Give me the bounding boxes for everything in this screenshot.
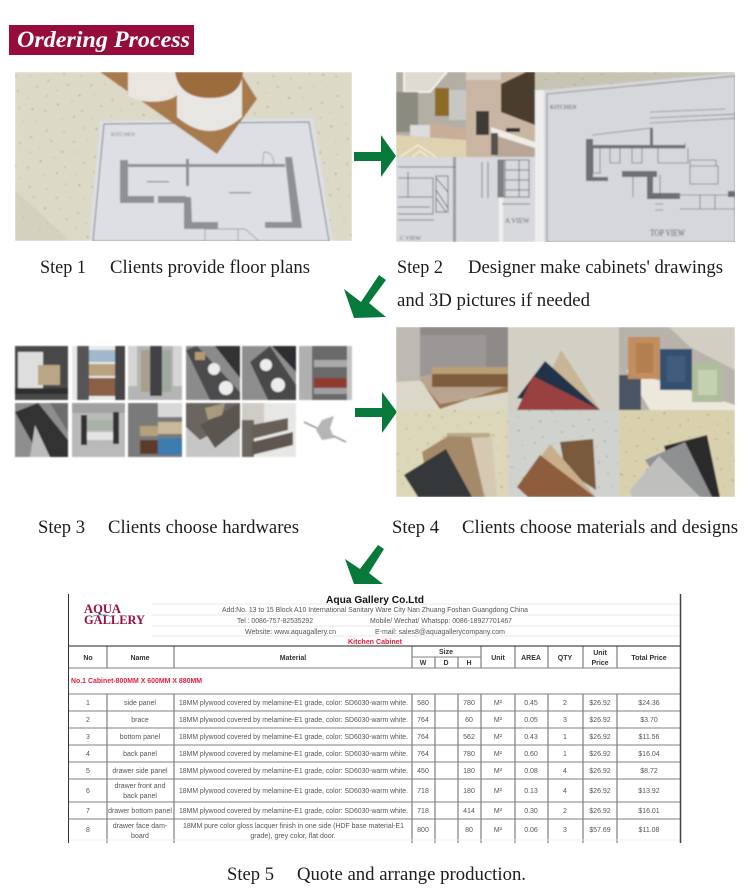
step 2 caption: and 3D pictures if needed: [397, 290, 590, 311]
column headers: Size: [439, 649, 453, 656]
row 4: M²: [494, 751, 503, 758]
column headers: D: [443, 660, 449, 667]
arrow: step 4 to step 5: [345, 545, 384, 584]
step 1 caption: Clients provide floor plans: [110, 257, 310, 278]
row 6: 180: [463, 788, 475, 795]
row 6: 718: [417, 788, 429, 795]
step 2 caption: Designer make cabinets' drawings: [468, 257, 723, 278]
row 6: 18MM plywood covered by melamine-E1 grade, color: SD6030-warm white.: [179, 788, 408, 795]
hardware: drawer with plates: [242, 346, 296, 400]
row 3: [86, 734, 660, 741]
column headers: Name: [130, 655, 150, 662]
row 7: M²: [494, 808, 503, 815]
3D render: kitchen: [396, 72, 466, 157]
row 6: $13.92: [638, 788, 660, 795]
row 4: $16.04: [638, 751, 660, 758]
column headers: Total Price: [631, 655, 667, 662]
company header: Website: www.aquagallery.cn: [245, 629, 336, 636]
row 1: $26.92: [589, 700, 611, 707]
hardware: drawer organiser: [15, 403, 68, 457]
row 8: 0.06: [524, 827, 538, 834]
material: walnut panels: [508, 410, 619, 497]
hardware: drawer with bowls: [186, 346, 240, 400]
company header: Kitchen Cabinet: [348, 639, 403, 646]
row 6: $26.92: [589, 788, 611, 795]
arrow: step 1 to step 2: [354, 135, 396, 177]
row 7: [86, 808, 660, 815]
row 3: 18MM plywood covered by melamine-E1 grade, color: SD6030-warm white.: [179, 734, 408, 741]
hardware: hinge: [304, 416, 346, 442]
logo: Aqua Gallery: [84, 601, 146, 627]
row 2: 3: [563, 717, 567, 724]
row 5: 5: [86, 768, 90, 775]
row 1: 0.45: [524, 700, 538, 707]
company header: Mobile/ Wechat/ Whatspp: 0086-18927701467: [370, 618, 512, 625]
row 8: 80: [465, 827, 473, 834]
row 5: 450: [417, 768, 429, 775]
column headers: Price: [591, 660, 609, 667]
row 7: 7: [86, 808, 90, 815]
column headers: Material: [280, 655, 306, 662]
row 2: 18MM plywood covered by melamine-E1 grade, color: SD6030-warm white.: [179, 717, 408, 724]
row 4: 1: [563, 751, 567, 758]
material: plywood samples: [396, 327, 508, 410]
row 4: 780: [463, 751, 475, 758]
column headers: [83, 649, 667, 667]
step 5 caption: Quote and arrange production.: [297, 864, 526, 885]
quotation table: [68, 594, 681, 843]
hardware: larder pull-out: [128, 403, 182, 457]
row 5: $26.92: [589, 768, 611, 775]
row 7: 0.30: [524, 808, 538, 815]
step 4 caption: Clients choose materials and designs: [462, 517, 738, 538]
step 3 caption: Step 3: [38, 517, 85, 538]
view drawings: A VIEW: [505, 217, 530, 225]
row 3: 562: [463, 734, 475, 741]
row 5: $8.72: [640, 768, 658, 775]
row 1: 18MM plywood covered by melamine-E1 grade, color: SD6030-warm white.: [179, 700, 408, 707]
row 5: 18MM plywood covered by melamine-E1 grade, color: SD6030-warm white.: [179, 768, 408, 775]
hardware: two drawers on cabinet: [242, 403, 296, 457]
photo: floor plan on speckled counter: KITCHEN: [111, 132, 135, 138]
row 6: 4: [563, 788, 567, 795]
row 3: 1: [563, 734, 567, 741]
row 1: 2: [563, 700, 567, 707]
photo grid: hardware: [15, 346, 352, 457]
3D render: tall units: [466, 72, 535, 157]
row 1: $24.36: [638, 700, 660, 707]
row 4: 0.60: [524, 751, 538, 758]
logo: Aqua Gallery: AQUA: [84, 601, 122, 616]
row 3: M²: [494, 734, 503, 741]
row 8: 800: [417, 827, 429, 834]
row 7: 18MM plywood covered by melamine-E1 grade, color: SD6030-warm white.: [179, 808, 408, 815]
row 8: board: [131, 833, 149, 840]
row 2: 0.05: [524, 717, 538, 724]
row 2: $26.92: [589, 717, 611, 724]
top view drawing: TOP VIEW: [650, 228, 685, 238]
row 5: [86, 768, 658, 775]
row 4: back panel: [123, 751, 157, 758]
row 7: drawer bottom panel: [108, 808, 172, 815]
row 6: drawer front and: [115, 783, 166, 790]
row 2: $3.70: [640, 717, 658, 724]
material: red and blue panels: [508, 327, 619, 410]
view drawings: [396, 157, 535, 242]
step 1 caption: Step 1: [40, 257, 86, 278]
column headers: W: [420, 660, 427, 667]
material: dark and wood panels: [396, 410, 508, 497]
row 7: $16.01: [638, 808, 660, 815]
row 2: 764: [417, 717, 429, 724]
column headers: Unit: [491, 655, 505, 662]
step 5 caption: Step 5: [227, 864, 274, 885]
company header: Tel : 0086-757-82535292: [237, 618, 313, 625]
company header: [222, 595, 528, 646]
row 6: [86, 783, 660, 800]
hardware: corner larder: [128, 346, 182, 400]
hardware: open drawers: [186, 403, 240, 457]
row 5: 180: [463, 768, 475, 775]
row 3: 3: [86, 734, 90, 741]
row 1: 780: [463, 700, 475, 707]
row 7: 718: [417, 808, 429, 815]
row 8: drawer face dam-: [113, 823, 168, 830]
row 6: 0.13: [524, 788, 538, 795]
hardware: corner pull-out: [15, 346, 68, 400]
view drawings: C VIEW: [400, 236, 421, 242]
row 6: back panel: [123, 793, 157, 800]
title banner: Ordering Process: [17, 27, 190, 52]
row 8: 3: [563, 827, 567, 834]
company header: Aqua Gallery Co.Ltd: [326, 595, 424, 606]
row 2: [86, 717, 658, 724]
row 7: $26.92: [589, 808, 611, 815]
column headers: Unit: [593, 650, 607, 657]
row 4: 764: [417, 751, 429, 758]
row 2: brace: [131, 717, 149, 724]
row 4: $26.92: [589, 751, 611, 758]
photo: cabinet drawings and 3D render: [396, 72, 740, 242]
row 1: [86, 700, 660, 707]
table grid: [68, 594, 681, 843]
row 4: 18MM plywood covered by melamine-E1 grade, color: SD6030-warm white.: [179, 751, 408, 758]
row 8: $11.08: [639, 827, 660, 834]
arrow: step 2 to step 3: [344, 275, 386, 318]
top view drawing: [535, 72, 740, 242]
row 3: bottom panel: [120, 734, 161, 741]
row 1: M²: [494, 700, 503, 707]
step 3 caption: Clients choose hardwares: [108, 517, 299, 538]
row 6: 6: [86, 788, 90, 795]
hardware: tall larder: [72, 346, 125, 400]
row 5: M²: [494, 768, 503, 775]
row 3: $11.56: [639, 734, 660, 741]
hardware: basket: [72, 403, 125, 457]
row 4: 4: [86, 751, 90, 758]
step 2 caption: [397, 257, 723, 311]
section label: No.1 Cabinet-800MM X 600MM X 880MM: [71, 678, 202, 685]
row 1: 580: [417, 700, 429, 707]
row 8: 18MM pure color gloss lacquer finish in one side (HDF base material-E1: [183, 823, 404, 830]
company header: Add:No. 13 to 15 Block A10 International Sanitary Ware City Nan Zhuang Foshan Guangdong China: [222, 607, 528, 614]
step 2 caption: Step 2: [397, 257, 443, 278]
row 8: 8: [86, 827, 90, 834]
row 8: M²: [494, 827, 503, 834]
column headers: AREA: [521, 655, 541, 662]
row 2: 60: [465, 717, 473, 724]
column headers: No: [83, 655, 93, 662]
row 6: M²: [494, 788, 503, 795]
hardware: pull-out shelf: [299, 346, 352, 400]
row 1: 1: [86, 700, 90, 707]
row 2: M²: [494, 717, 503, 724]
row 5: 4: [563, 768, 567, 775]
company header: E-mail: sales8@aquagallerycompany.com: [375, 629, 505, 636]
column headers: QTY: [558, 655, 573, 662]
row 8: $57.69: [589, 827, 611, 834]
row 7: 414: [463, 808, 475, 815]
material: cabinet doors: [619, 327, 735, 410]
arrow: step 3 to step 4: [355, 392, 397, 433]
logo: Aqua Gallery: GALLERY: [84, 612, 146, 627]
row 7: 2: [563, 808, 567, 815]
photo: floor plan on speckled counter: [15, 72, 352, 241]
row 5: 0.08: [524, 768, 538, 775]
row 3: 0.43: [524, 734, 538, 741]
row 8: grade), grey color, flat door.: [250, 833, 336, 840]
row 1: side panel: [124, 700, 156, 707]
photo grid: materials: [396, 327, 735, 497]
column headers: H: [466, 660, 472, 667]
step 4 caption: Step 4: [392, 517, 439, 538]
row 4: [86, 751, 660, 758]
row 3: 764: [417, 734, 429, 741]
row 2: 2: [86, 717, 90, 724]
top view drawing: KITCHEN: [550, 105, 577, 111]
row 3: $26.92: [589, 734, 611, 741]
row 5: drawer side panel: [112, 768, 168, 775]
material: stone panels: [619, 410, 735, 497]
row 8: [86, 823, 660, 840]
